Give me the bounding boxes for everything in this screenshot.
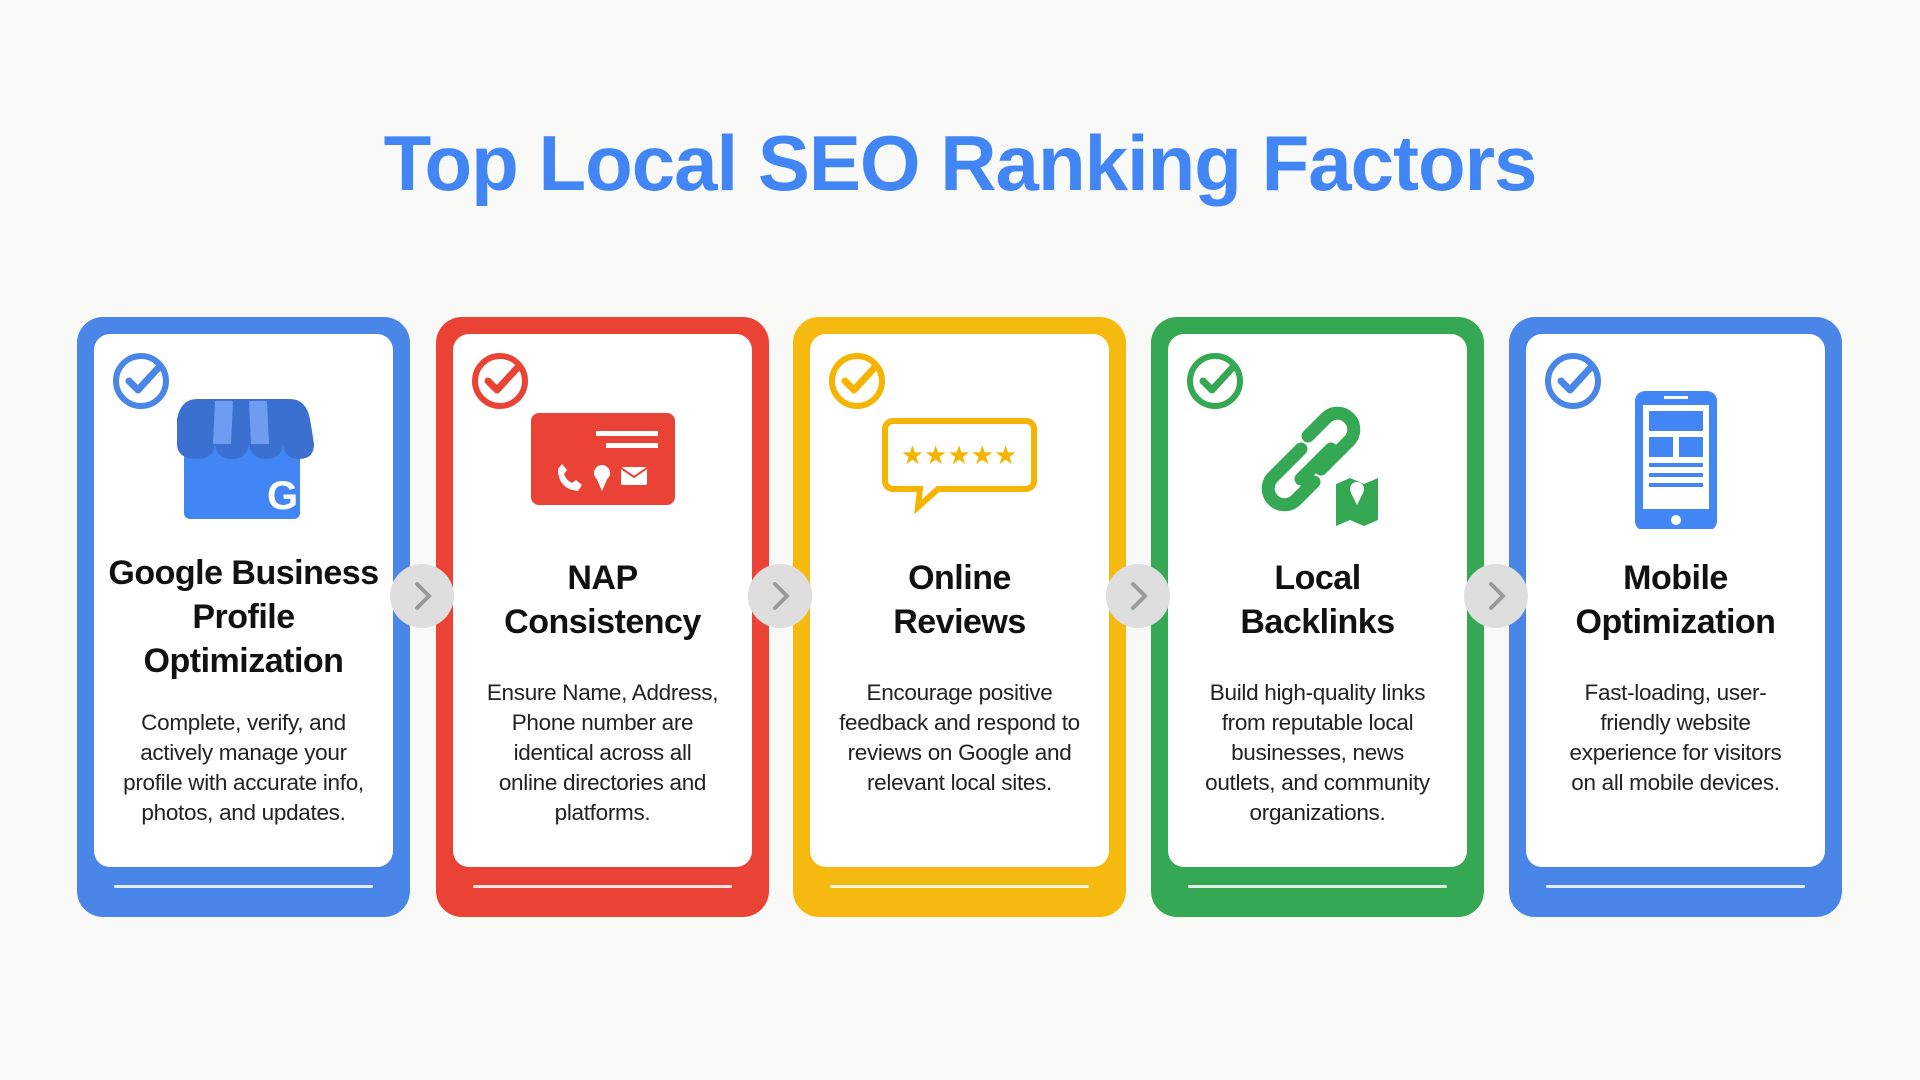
text [487, 680, 718, 825]
text: friendly website [1600, 710, 1751, 735]
heading: Reviews [893, 603, 1026, 641]
icon: check [1187, 353, 1243, 409]
arrow [1464, 564, 1528, 628]
heading: Profile [192, 598, 295, 636]
text: platforms. [555, 800, 650, 825]
heading: Optimization [1576, 603, 1775, 641]
heading: NAP [567, 559, 638, 597]
panel: online reviews [793, 317, 1126, 917]
text: online directories and [499, 770, 706, 795]
heading: Google Business [108, 554, 379, 592]
text: experience for visitors [1570, 740, 1781, 765]
text: organizations. [1250, 800, 1385, 825]
text: actively manage your [140, 740, 347, 765]
heading [893, 559, 1026, 641]
text [123, 710, 364, 825]
heading [504, 559, 702, 641]
icon: link [1262, 406, 1378, 526]
icon: check [472, 353, 528, 409]
heading [108, 554, 379, 680]
panel: NAP [436, 317, 769, 917]
icon: check [829, 353, 885, 409]
text [839, 680, 1080, 795]
text: Fast-loading, user- [1585, 680, 1766, 705]
arrow [1106, 564, 1170, 628]
arrow [748, 564, 812, 628]
heading: Optimization [144, 642, 343, 680]
text: identical across all [514, 740, 691, 765]
text: Ensure Name, Address, [487, 680, 718, 705]
text: on all mobile devices. [1571, 770, 1780, 795]
heading: Consistency [504, 603, 701, 641]
text: photos, and updates. [141, 800, 346, 825]
icon: check [1545, 353, 1601, 409]
icon: review bubble: ★★★★★ [901, 441, 1017, 471]
panel: mobile optimization [1509, 317, 1842, 917]
icon: storefront [177, 399, 314, 519]
text [1570, 680, 1781, 795]
arrow [390, 564, 454, 628]
icon: phone [1635, 391, 1717, 529]
icon: review bubble [882, 418, 1037, 514]
text: Encourage positive [866, 680, 1052, 705]
text: profile with accurate info, [123, 770, 364, 795]
text [1205, 680, 1430, 825]
heading [1576, 559, 1775, 641]
icon: contact card [531, 413, 675, 505]
icon: storefront: G [267, 474, 298, 518]
panel: google business profile [77, 317, 410, 917]
text: relevant local sites. [867, 770, 1052, 795]
text: Phone number are [512, 710, 693, 735]
heading: Online [908, 559, 1011, 597]
heading [1240, 559, 1395, 641]
text: reviews on Google and [848, 740, 1071, 765]
text: from reputable local [1222, 710, 1413, 735]
icon: check [113, 353, 169, 409]
text: businesses, news [1231, 740, 1404, 765]
text: Complete, verify, and [141, 710, 346, 735]
heading: Backlinks [1240, 603, 1395, 641]
heading: Mobile [1623, 559, 1728, 597]
text: Build high-quality links [1210, 680, 1425, 705]
heading: Local [1274, 559, 1361, 597]
panel: local backlinks [1151, 317, 1484, 917]
title: Top Local SEO Ranking Factors [384, 119, 1536, 207]
text: feedback and respond to [839, 710, 1080, 735]
text: outlets, and community [1205, 770, 1430, 795]
